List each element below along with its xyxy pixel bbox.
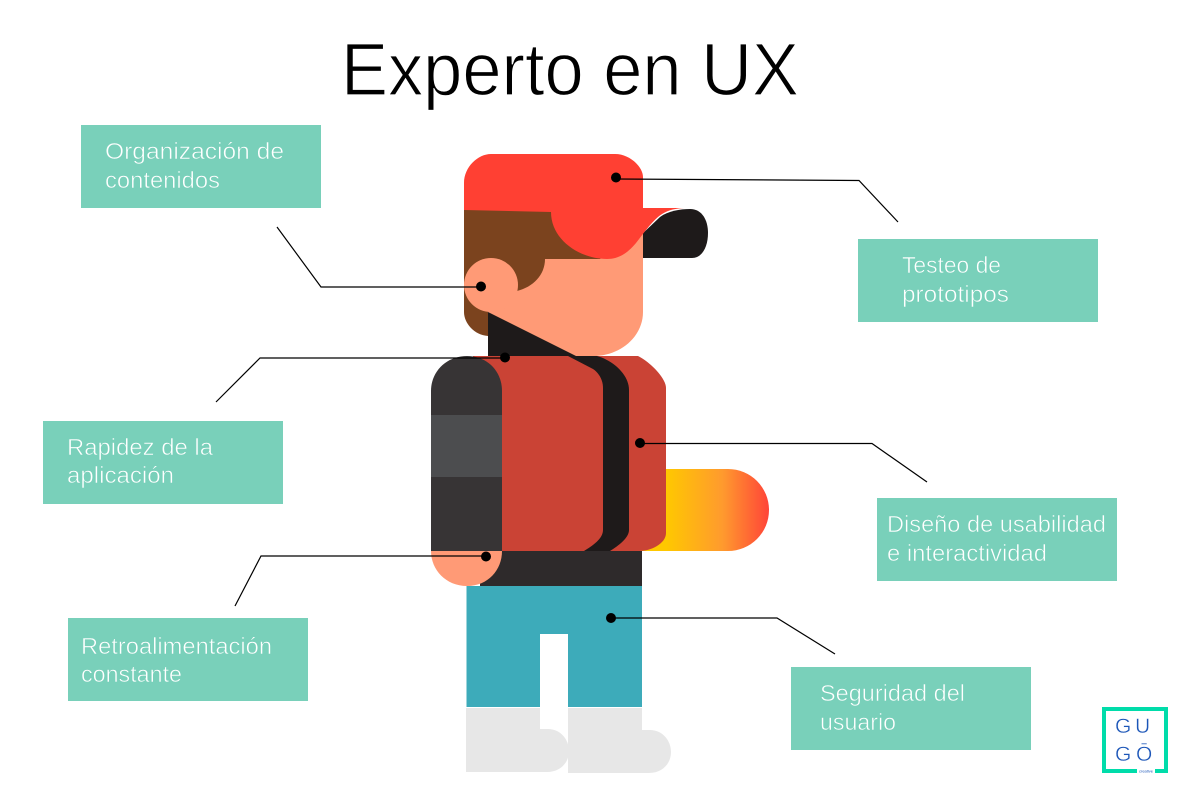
neck collar: [488, 312, 580, 358]
cap visor: [640, 209, 708, 258]
callout: Seguridad del usuario: usuario: [820, 709, 896, 735]
ear: [464, 258, 518, 312]
callout: Retroalimentación constante: Retroalimentación: [81, 633, 272, 659]
sleeve band: [431, 415, 502, 477]
leader line: ear to Organización de contenidos: [277, 227, 486, 292]
left shoe: [466, 708, 569, 772]
callout: Testeo de prototipos: [858, 239, 1098, 322]
shirt: [480, 551, 642, 587]
callout: Seguridad del usuario: [791, 667, 1031, 750]
logo: GUGŌ: [1104, 709, 1166, 774]
callout: Rapidez de la aplicación: Rapidez de la: [67, 434, 213, 460]
logo: GUGŌ: Ō: [1136, 743, 1152, 766]
leader line: cap to Testeo de prototipos: [611, 172, 898, 222]
logo: GUGŌ: U: [1135, 715, 1150, 738]
callout: Retroalimentación constante: [68, 618, 308, 701]
jacket front: [473, 356, 603, 551]
jet flame: [630, 469, 769, 551]
leader line: trousers to Seguridad del usuario: [606, 613, 835, 654]
callout: Organización de contenidos: [81, 125, 321, 208]
callout: Diseño de usabilidad e interactividad: e interactividad: [887, 540, 1047, 566]
callout: Organización de contenidos: contenidos: [105, 167, 220, 193]
callout: Seguridad del usuario: Seguridad del: [820, 680, 965, 706]
right shoe: [568, 708, 671, 773]
callout: Retroalimentación constante: constante: [81, 661, 182, 687]
character illustration: [431, 154, 769, 773]
leader line: jacket to Diseño de usabilidad: [635, 438, 927, 482]
leader line: collar to Rapidez de la aplicación: [216, 352, 510, 402]
jacket back: [590, 356, 666, 551]
callout: Organización de contenidos: Organización de: [105, 138, 284, 164]
callout: Diseño de usabilidad e interactividad: Diseño de usabilidad: [887, 511, 1106, 537]
hand: [431, 551, 502, 586]
callout: Rapidez de la aplicación: [43, 421, 283, 504]
callout: Rapidez de la aplicación: aplicación: [67, 462, 174, 488]
cap: [464, 154, 687, 259]
callout: Diseño de usabilidad e interactividad: [877, 498, 1117, 581]
trousers: [466, 586, 642, 707]
arm sleeve: [431, 356, 502, 551]
hair: [464, 205, 610, 336]
logo: GUGŌ: G: [1115, 743, 1131, 766]
face: [488, 230, 643, 356]
leader line: hand to Retroalimentación constante: [235, 552, 491, 606]
callout: Testeo de prototipos: prototipos: [902, 281, 1009, 307]
title: Experto en UX: [341, 28, 799, 111]
logo: GUGŌ: G: [1115, 715, 1131, 738]
callout: Testeo de prototipos: Testeo de: [902, 252, 1001, 278]
logo: GUGŌ: creative: [1139, 768, 1154, 774]
backpack strap: [560, 356, 629, 551]
